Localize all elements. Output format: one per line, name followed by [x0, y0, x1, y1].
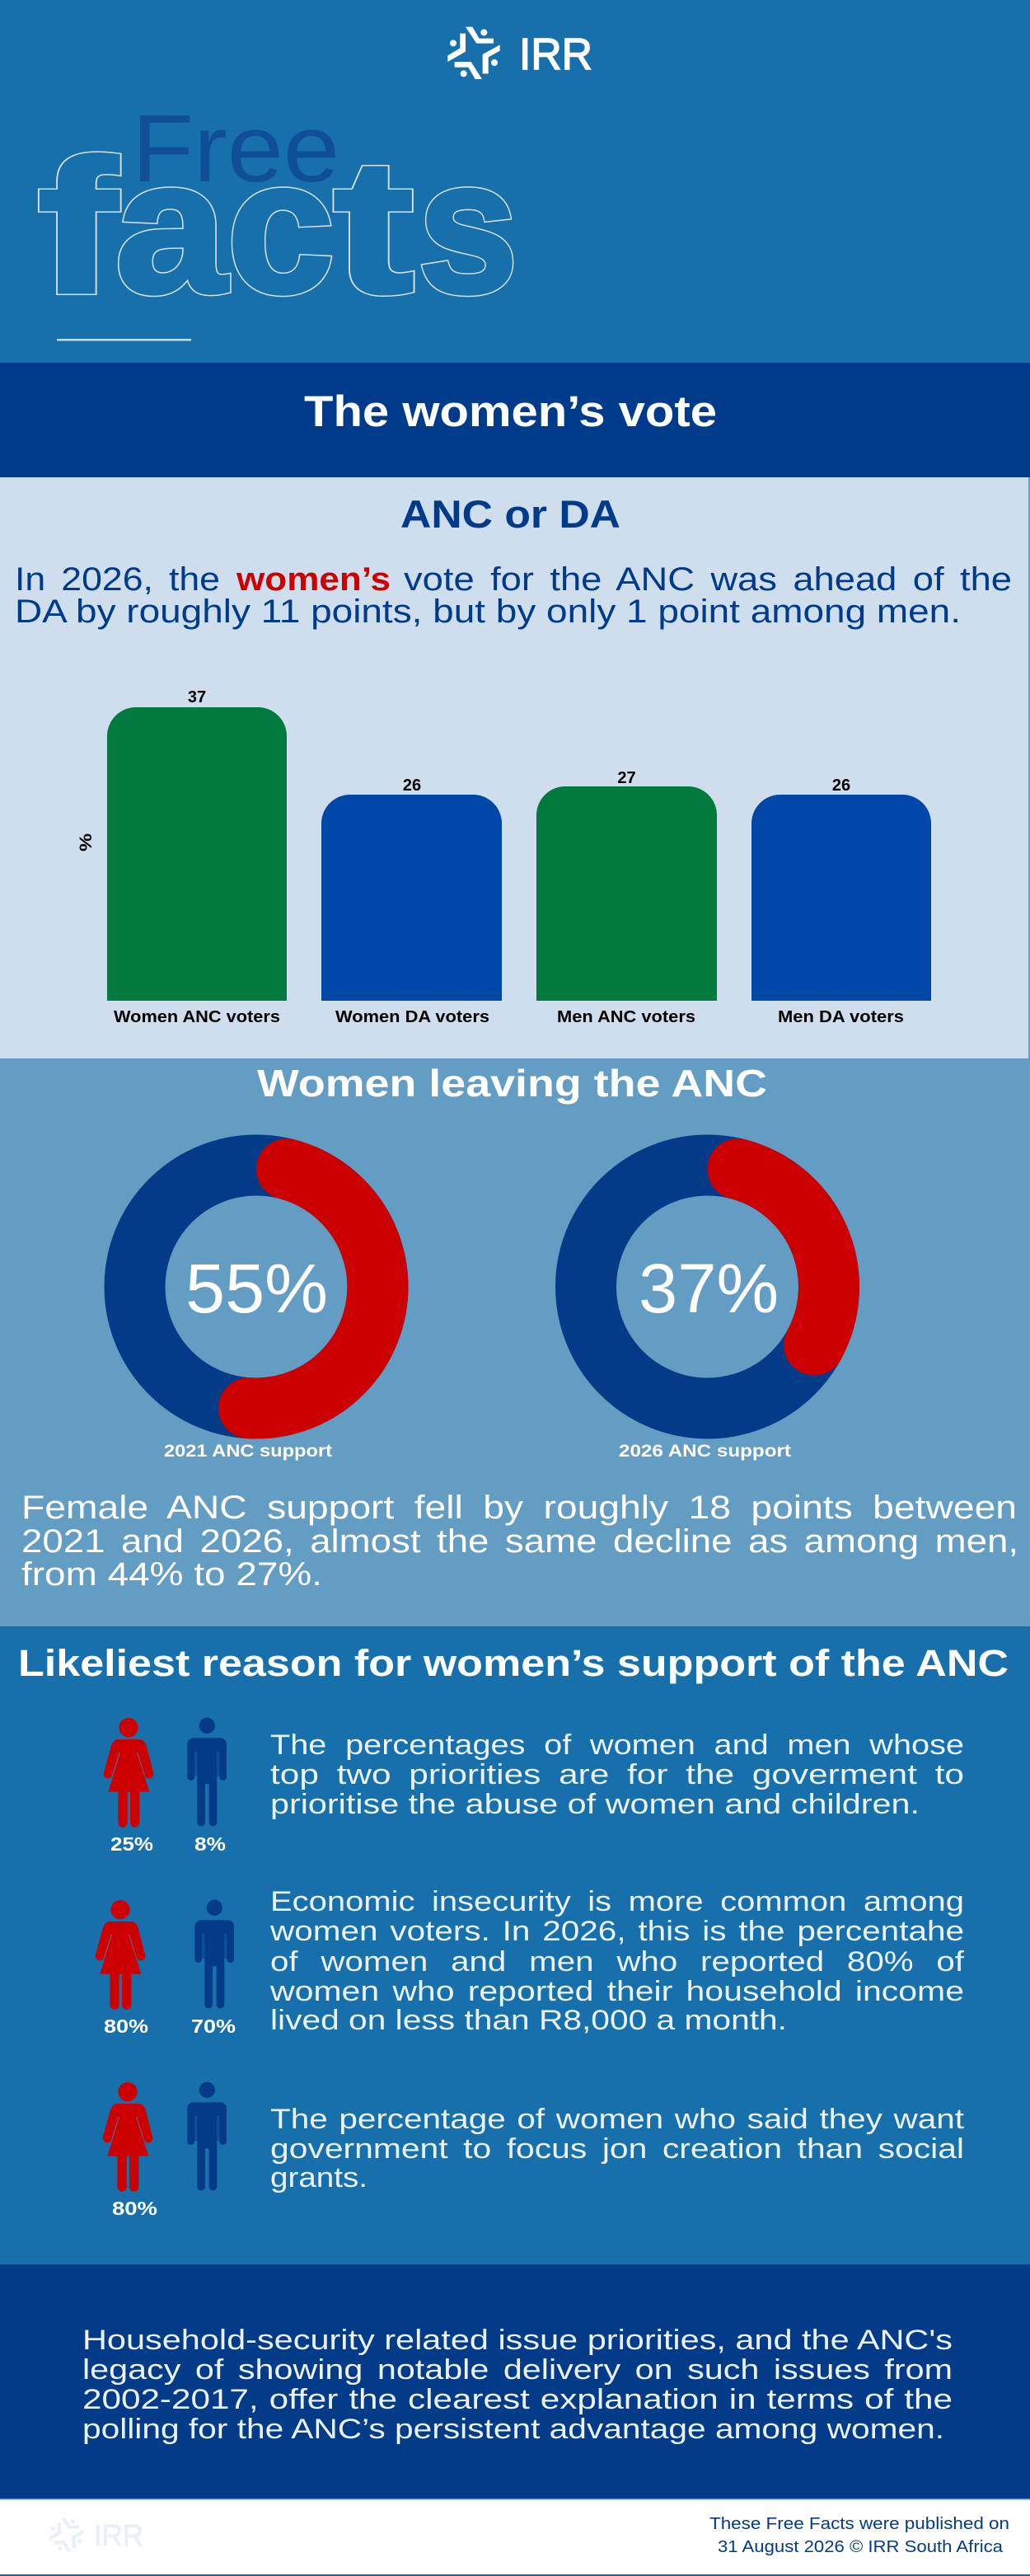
- bar: Women ANC voters 37: 37: [188, 688, 206, 706]
- icon: faded IRR logo: [49, 2518, 83, 2552]
- value: 25%: 25%: [110, 1833, 153, 1855]
- heading: Likeliest reason: Likeliest reason for women’s support of the ANC: [18, 1642, 1009, 1684]
- bar chart: [77, 688, 931, 1026]
- text: ANC or DA summary: [15, 561, 1012, 630]
- value: 70%: 70%: [191, 2015, 236, 2037]
- text: conclusion: 2002-2017, offer the clearest explanation in terms of the: [82, 2384, 953, 2415]
- bar: Women DA voters 26: 26: [403, 777, 421, 795]
- title: facts outline: [38, 120, 517, 332]
- text: conclusion: [82, 2325, 953, 2445]
- text: publication note: [709, 2515, 1009, 2556]
- text: job creation: [270, 2104, 965, 2194]
- bar: Men ANC voters 27: Men ANC voters: [557, 1008, 695, 1026]
- text: conclusion: polling for the ANC’s persistent advantage among women.: [82, 2414, 944, 2445]
- donut chart: 2026 ANC support 37%: 37%: [639, 1250, 779, 1327]
- icon: man: [187, 2082, 227, 2190]
- faded logo wordmark: IRR: [94, 2518, 143, 2552]
- text: decline summary: 2021 and 2026, almost the same decline as among men,: [21, 1523, 1018, 1560]
- heading: ANC or DA: ANC or DA: [400, 492, 620, 536]
- title: facts outline: s: [419, 120, 517, 332]
- row: economic insecurity: [96, 1886, 965, 2037]
- text: decline summary: Female ANC support fell by roughly 18 points between: [21, 1490, 1017, 1526]
- bar: Women DA voters 26: [321, 777, 502, 1026]
- panel: Women leaving the ANC: [0, 1058, 1030, 1626]
- text: abuse priority: [270, 1729, 964, 1820]
- logo wordmark: IRR: [519, 30, 592, 79]
- bar: Women ANC voters 37: Women ANC voters: [114, 1008, 280, 1026]
- text: economic insecurity: of women and men who reported 80% of: [270, 1946, 965, 1978]
- text: conclusion: legacy of showing notable delivery on such issues from: [82, 2354, 953, 2386]
- value: 80%: 80%: [104, 2015, 148, 2037]
- text: conclusion: Household-security related issue priorities, and the ANC's: [82, 2325, 953, 2356]
- title: facts outline: t: [334, 120, 414, 332]
- text: economic insecurity: [269, 1886, 965, 2036]
- title: facts outline: s: [419, 120, 517, 332]
- heading: Women leaving the ANC: Women leaving the ANC: [257, 1062, 767, 1105]
- title: facts outline: f: [38, 120, 119, 332]
- bar: Men DA voters 26: [751, 777, 931, 1026]
- bar: Men ANC voters 27: 27: [617, 769, 636, 787]
- value: 8%: 8%: [194, 1833, 226, 1855]
- row: job creation: [103, 2082, 965, 2219]
- bar: Women ANC voters 37: [107, 688, 287, 1026]
- donut chart: 2026 ANC support 37%: 2026 ANC support: [619, 1442, 791, 1461]
- text: publication note: These Free Facts were published on: [709, 2515, 1009, 2533]
- title: facts outline: c: [227, 120, 335, 332]
- panel: footer: [0, 2499, 1030, 2576]
- donut chart: 2021 ANC support 55%: [135, 1166, 377, 1461]
- text: economic insecurity: lived on less than R8,000 a month.: [270, 2005, 787, 2036]
- donut chart: 2026 ANC support 37%: [586, 1166, 829, 1461]
- panel: conclusion: [0, 2264, 1030, 2499]
- bar: Women DA voters 26: Women DA voters: [335, 1008, 489, 1026]
- bar: Men DA voters 26: Men DA voters: [778, 1008, 904, 1026]
- axis label: %: [77, 833, 96, 852]
- panel: Likeliest reason: [0, 1626, 1030, 2264]
- title: facts outline: f: [38, 120, 119, 332]
- text: abuse priority: The percentages of women and men whose: [270, 1729, 964, 1761]
- row: abuse priority: [104, 1718, 964, 1855]
- title: facts outline: a: [115, 120, 228, 332]
- panel: header: [0, 0, 1030, 363]
- title: facts outline: a: [115, 120, 228, 332]
- text: economic insecurity: women voters. In 2026, this is the percentahe: [269, 1916, 964, 1947]
- icon: man: [187, 1718, 227, 1826]
- text: ANC or DA summary: DA by roughly 11 points, but by only 1 point among men.: [15, 594, 961, 630]
- text: ANC or DA summary: vote for the ANC was ahead of the: [404, 561, 1012, 598]
- text: economic insecurity: Economic insecurity is more common among: [270, 1886, 964, 1917]
- text: ANC or DA summary: women’s: [236, 561, 391, 598]
- icon: man: [194, 1900, 234, 2008]
- icon: IRR logo: [447, 27, 500, 79]
- icon: woman: [103, 2082, 152, 2192]
- value: 80%: 80%: [112, 2198, 157, 2219]
- panel: title band: [0, 363, 1030, 477]
- donut chart: 2021 ANC support 55%: 55%: [185, 1250, 328, 1327]
- main title: The women’s vote: [304, 387, 717, 436]
- text: job creation: grants.: [270, 2162, 368, 2194]
- text: job creation: The percentage of women who said they want: [270, 2104, 965, 2135]
- title: facts outline: t: [334, 120, 414, 332]
- text: economic insecurity: women who reported their household income: [269, 1976, 964, 2007]
- text: publication note: 31 August 2026 © IRR South Africa: [718, 2538, 1004, 2556]
- text: abuse priority: prioritise the abuse of women and children.: [270, 1789, 920, 1820]
- donut chart: 2021 ANC support 55%: 2021 ANC support: [164, 1442, 332, 1461]
- icon: woman: [104, 1718, 153, 1828]
- bar: Men DA voters 26: 26: [832, 777, 850, 795]
- icon: woman: [96, 1900, 145, 2010]
- title: facts outline: c: [227, 120, 335, 332]
- text: decline summary: from 44% to 27%.: [21, 1556, 322, 1593]
- text: ANC or DA summary: In 2026, the: [15, 561, 220, 598]
- title: Free: Free: [132, 95, 339, 202]
- text: job creation: government to focus jon creation than social: [270, 2133, 964, 2165]
- panel: ANC or DA: [0, 477, 1030, 1058]
- text: decline summary: [21, 1490, 1018, 1593]
- text: abuse priority: top two priorities are for the goverment to: [270, 1759, 964, 1790]
- bar: Men ANC voters 27: [536, 769, 717, 1026]
